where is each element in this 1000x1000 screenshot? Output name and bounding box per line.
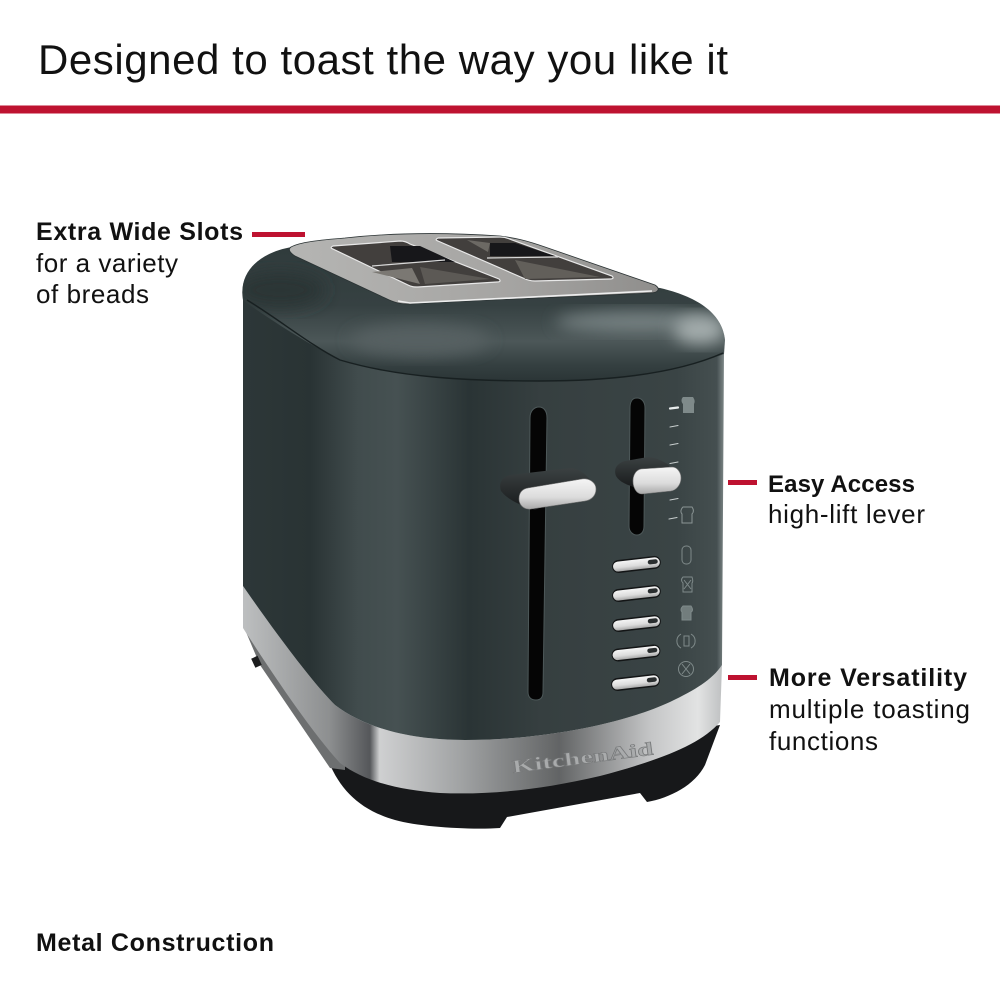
title: Designed to toast the way you like it (38, 36, 728, 83)
toaster black base (328, 725, 720, 829)
red header rule (0, 106, 1000, 114)
callout description line 2: of breads (36, 279, 149, 309)
icon: cancel (678, 662, 694, 676)
callout: easy access (728, 471, 925, 529)
plate front edge highlight (398, 291, 652, 303)
callout description line 1: for a variety (36, 248, 178, 278)
function buttons (610, 555, 662, 692)
button 5 (610, 673, 661, 692)
callout: more versatility (728, 664, 970, 756)
button 1 (611, 555, 662, 574)
callout heading: Extra Wide Slots (36, 218, 243, 246)
button 2 (611, 584, 662, 603)
toaster foot (251, 656, 262, 668)
callout heading: More Versatility (769, 664, 967, 692)
brand logo: KitchenAid (511, 739, 656, 778)
callout description line 2: functions (769, 726, 878, 756)
toaster illustration (235, 234, 730, 829)
button 4 (611, 644, 661, 662)
callout description: high-lift lever (768, 499, 925, 529)
button 3 (611, 614, 662, 633)
icon: reheat (681, 606, 692, 620)
callout description line 1: multiple toasting (769, 694, 970, 724)
function icons (677, 546, 695, 676)
left bread slot (331, 241, 500, 287)
browning level ticks (669, 408, 678, 519)
toaster lid (242, 247, 725, 380)
icon: defrost (682, 577, 693, 592)
metal construction label: Metal Construction (36, 929, 274, 957)
right bread slot (436, 237, 613, 281)
top plate (289, 234, 658, 304)
right lever slot (629, 398, 645, 535)
icon: dark toast (682, 397, 695, 413)
callout leader line (728, 480, 757, 485)
callout heading: Easy Access (768, 471, 915, 498)
icon: light toast (681, 507, 694, 523)
toaster lower grey skirt (243, 600, 345, 770)
callout leader line (728, 675, 757, 680)
toaster steel band (243, 586, 722, 793)
small lever handle (615, 457, 681, 494)
toaster body (243, 295, 724, 740)
icon: lift and look (677, 634, 695, 648)
large lever handle (500, 468, 596, 510)
left lever slot (528, 407, 547, 700)
icon: bagel (682, 546, 691, 564)
callout leader line (252, 232, 305, 237)
callout: extra wide slots (36, 218, 305, 309)
lid seam (247, 300, 723, 381)
